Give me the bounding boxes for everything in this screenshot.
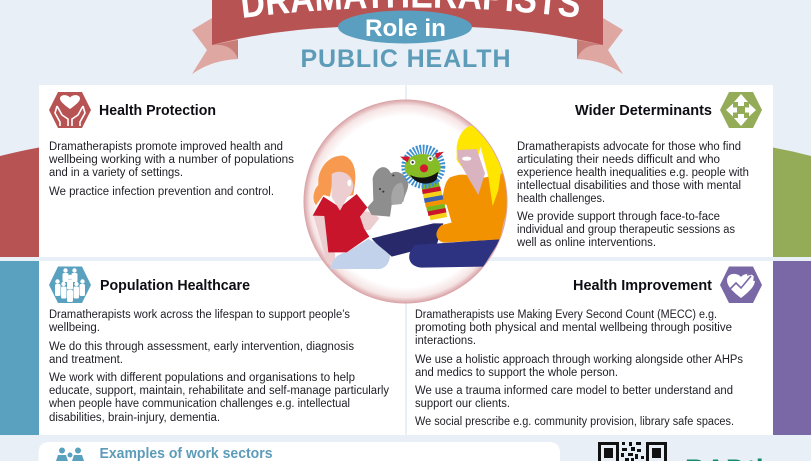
text: population healthcare body: wellbeing. (48, 322, 100, 334)
text: wider determinants body: well as online interventions. (516, 237, 656, 249)
text: wider determinants body: articulating their needs difficult and who (517, 154, 720, 166)
text: health improvement body: promoting both physical and mental wellbeing through positive (415, 322, 732, 334)
text: population healthcare body: and treatment. (49, 354, 123, 366)
oval: role in (338, 10, 472, 44)
text: wider determinants body: experience health inequalities e.g. people with (517, 167, 749, 179)
text: health protection body (48, 141, 294, 198)
figure: therapist (372, 126, 510, 268)
icon: crowd of people (49, 266, 91, 303)
text: health improvement body: We social prescribe e.g. community provision, library safe spaces. (415, 416, 734, 428)
text: health protection body: and in a variety of settings. (49, 167, 183, 179)
title: public health: PUBLIC HEALTH (300, 45, 510, 73)
heading: health protection: Health Protection (99, 102, 216, 119)
icon: four arrows (720, 92, 762, 128)
ribbon tail left (192, 18, 238, 74)
figure: client (313, 156, 390, 269)
text: health protection body: wellbeing working with a number of populations (48, 154, 294, 166)
ribbon fold right (577, 40, 603, 59)
icon: people group (56, 448, 84, 461)
panel: population healthcare (39, 261, 405, 435)
band: purple right (773, 261, 811, 435)
text: population healthcare body: Dramatherapists work across the lifespan to support people’s (49, 309, 350, 321)
heading: health improvement: Health Improvement (573, 277, 712, 294)
ribbon tail right (577, 18, 623, 74)
panel: examples of work sectors (38, 442, 560, 461)
text: health protection body: Dramatherapists promote improved health and (49, 141, 283, 153)
panel: health protection (39, 85, 405, 257)
QR code (598, 442, 667, 461)
text: population healthcare body: educate, support, maintain, rehabilitate and self-manage particularly (49, 385, 389, 397)
title banner (192, 0, 623, 74)
text: health improvement body: Dramatherapists use Making Every Second Count (MECC) e.g. (415, 309, 717, 321)
icon: heart with rising arrow (720, 266, 762, 303)
ribbon main (212, 0, 603, 45)
oval: role in: Role in (365, 15, 446, 42)
panel: wider determinants (407, 85, 773, 257)
heading: population healthcare: Population Healthcare (100, 277, 250, 294)
text: population healthcare body (48, 309, 389, 424)
band: green right (773, 148, 811, 257)
puppet: green monster (400, 149, 447, 218)
text: wider determinants body: individual and group therapeutic sessions as (517, 224, 735, 236)
text: wider determinants body: Dramatherapists advocate for those who find (517, 141, 741, 153)
text: wider determinants body: health challenges. (517, 193, 605, 205)
icon: hands holding heart (49, 92, 91, 128)
band: red left (0, 148, 39, 257)
text: health improvement body: and medics to support the whole person. (415, 367, 618, 379)
central illustration: therapist and client with puppets (304, 100, 510, 304)
band: blue left (0, 261, 39, 435)
text: population healthcare body: We work with different populations and organisations to help (49, 372, 355, 384)
heading: wider determinants: Wider Determinants (575, 102, 712, 119)
text: health improvement body: We use a holistic approach through working alongside other AHPs (415, 354, 743, 366)
text: health protection body: We practice infection prevention and control. (49, 186, 274, 198)
text: wider determinants body: intellectual disabilities and those with mental (517, 180, 741, 192)
text: health improvement body (415, 309, 743, 428)
text: wider determinants body (516, 141, 749, 249)
text: population healthcare body: when people have communication challenges e.g. intellectual (48, 398, 350, 410)
text: health improvement body: interactions. (415, 335, 476, 347)
text: population healthcare body: disabilities, brain-injury, dementia. (49, 412, 220, 424)
text: health improvement body: We use a trauma informed care model to better understand and (415, 385, 733, 397)
text: health improvement body: support our clients. (415, 398, 510, 410)
text: wider determinants body: We provide support through face-to-face (517, 211, 720, 223)
ribbon fold left (212, 40, 238, 59)
text: population healthcare body: We do this through assessment, early intervention, diagnosis (49, 341, 354, 353)
puppet: grey koala (367, 167, 408, 217)
panel: health improvement (407, 261, 773, 435)
